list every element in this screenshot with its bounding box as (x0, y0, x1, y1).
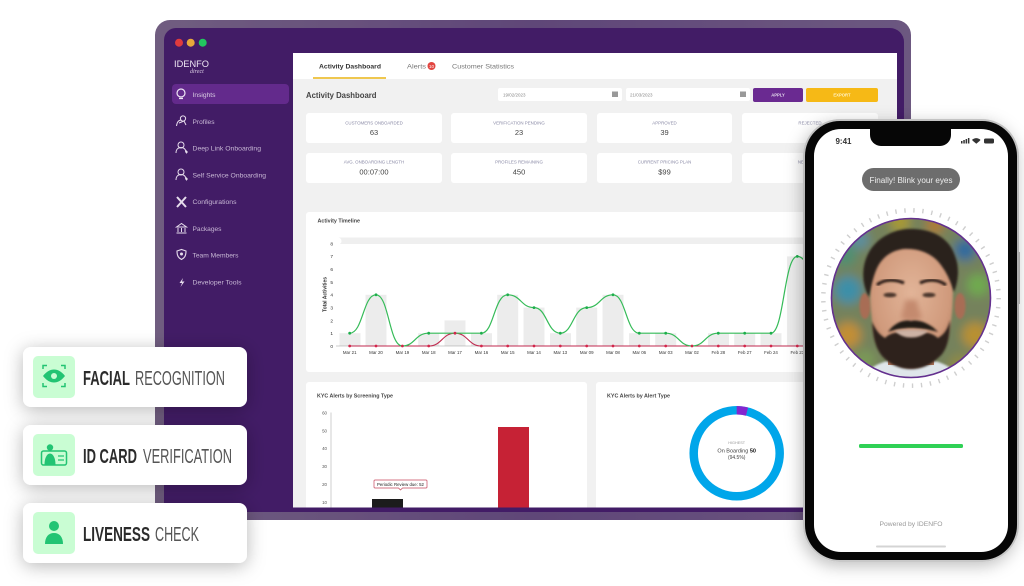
date filters and buttons: APPLY (771, 92, 785, 98)
y axis labels: 5 (330, 280, 333, 286)
label: facial recognition: FACIAL (83, 368, 130, 390)
stat: verification pending: VERIFICATION PENDING (493, 120, 545, 126)
phone body (803, 119, 1019, 562)
status bar time: 9:41 (835, 137, 852, 146)
y axis labels (322, 410, 328, 505)
window control dots (175, 39, 207, 47)
status icons (961, 138, 994, 144)
stat: next plan (742, 153, 878, 183)
panel: KYC alerts by alert type (596, 382, 886, 512)
face photo (830, 218, 992, 378)
y axis labels: 50 (322, 428, 328, 434)
nav item: Profiles (176, 116, 214, 126)
nav item: Self Service Onboarding: Self Service Onboarding (192, 172, 266, 180)
x axis labels: Mar 16 (475, 350, 489, 355)
stat: approved (597, 113, 732, 143)
label: facial recognition: RECOGNITION (135, 368, 225, 390)
label: id card verification: ID CARD (83, 446, 137, 468)
donut chart (694, 410, 780, 496)
tab bar: Alerts (407, 64, 427, 70)
y axis line (330, 412, 332, 508)
stat: current pricing plan: CURRENT PRICING PLAN (638, 160, 691, 164)
nav item: Packages (176, 224, 222, 233)
main content area (293, 53, 897, 508)
nav item: Deep Link Onboarding (176, 142, 261, 154)
label: liveness check: LIVENESS (83, 524, 150, 546)
feature badge: liveness check (23, 503, 247, 563)
y axis labels: 2 (330, 318, 333, 324)
icon: person (33, 512, 75, 554)
y axis labels: 60 (322, 410, 328, 416)
active nav item: Insights (172, 84, 289, 104)
instruction pill (862, 168, 960, 191)
x axis labels: Mar 18 (422, 350, 436, 355)
nav item: Configurations: Configurations (192, 199, 236, 206)
activity bars (340, 256, 808, 346)
y axis labels: 1 (330, 331, 333, 337)
y axis labels: 7 (330, 254, 333, 260)
x axis labels: Mar 03 (659, 350, 673, 355)
x axis labels: Feb 23 (790, 350, 805, 355)
neck (888, 360, 934, 365)
logo: IDENFO: direct (190, 69, 204, 75)
tab bar: Customer Statistics (452, 64, 515, 70)
y axis labels: 3 (330, 306, 333, 312)
laptop inner purple surface (164, 28, 904, 512)
x axis labels: Mar 02 (685, 350, 699, 355)
date filters and buttons: 19/02/2023 (503, 92, 526, 98)
nav item: Team Members: Team Members (192, 252, 238, 260)
phone screen (814, 129, 1008, 552)
page heading: Activity Dashboard (306, 91, 377, 100)
logo: IDENFO (174, 59, 209, 75)
label: id card verification: VERIFICATION (143, 446, 232, 468)
home indicator (876, 546, 946, 548)
tab bar (293, 53, 897, 79)
stat: approved: 39 (660, 128, 669, 137)
black bar (372, 499, 403, 508)
smile (895, 330, 928, 338)
stat: avg onboarding length (306, 153, 442, 183)
y axis labels: 10 (322, 500, 328, 505)
label: id card verification (83, 446, 232, 468)
active nav item: Insights: Insights (192, 92, 216, 99)
stat: next plan: NEXT PLAN (798, 160, 822, 164)
panel: KYC alerts by screening type (306, 382, 587, 512)
donut purple segment (737, 410, 747, 412)
x axis labels: Feb 27 (738, 350, 752, 355)
stat: current pricing plan (597, 153, 732, 183)
x axis labels: Mar 21 (343, 350, 357, 355)
baseline (336, 345, 808, 347)
eyebrows (877, 280, 946, 285)
x axis labels: Mar 17 (448, 350, 462, 355)
beard (872, 320, 950, 369)
x axis labels: Mar 09 (580, 350, 594, 355)
eyes (884, 293, 936, 297)
screening type bar chart (322, 410, 529, 508)
label: facial recognition (83, 368, 225, 390)
date filters and buttons (498, 88, 878, 102)
ears (860, 293, 966, 319)
y axis labels: 4 (330, 292, 333, 298)
x axis labels: Mar 19 (396, 350, 410, 355)
x axis labels: Mar 08 (606, 350, 620, 355)
x axis labels: Mar 06 (632, 350, 647, 355)
stat: profiles remaining: 450 (513, 168, 525, 176)
stat: verification pending (451, 113, 587, 143)
green series line (350, 256, 806, 346)
feature badge: facial recognition (23, 347, 247, 407)
tick ring (823, 210, 999, 386)
panel: activity timeline (306, 212, 884, 372)
face ring (832, 218, 990, 378)
tab bar: 10 (429, 64, 434, 69)
nav item: Developer Tools: Developer Tools (192, 280, 242, 286)
x axis labels: Mar 15 (501, 350, 515, 355)
progress bar (859, 444, 963, 448)
stat: avg onboarding length: AVG. ONBOARDING LENGTH (344, 160, 404, 164)
green series points (348, 255, 799, 335)
donut center label: (94.5%) (728, 455, 746, 461)
tooltip: Periodic Review due: 52 (377, 482, 425, 487)
red bar (498, 427, 529, 508)
label: liveness check: CHECK (155, 524, 199, 546)
phone bezel (805, 121, 1017, 560)
y axis labels: 30 (322, 464, 328, 469)
x axis labels: Mar 14 (527, 350, 541, 355)
nav item: Team Members (177, 250, 238, 260)
timeline chart (322, 242, 808, 355)
y axis labels: 8 (330, 242, 333, 248)
nav item: Self Service Onboarding (176, 169, 266, 180)
stat: profiles remaining (451, 153, 587, 183)
nav item: Developer Tools (180, 278, 242, 287)
y axis labels: 0 (330, 344, 333, 350)
timeline range slider (334, 238, 808, 244)
nav item: Deep Link Onboarding: Deep Link Onboarding (192, 146, 261, 152)
nav item: Packages: Packages (192, 226, 222, 233)
hair (863, 229, 958, 297)
stat: customers onboarded (306, 113, 442, 143)
x axis labels (343, 350, 805, 355)
date filters and buttons: 21/03/2023 (630, 92, 653, 98)
logo: IDENFO: IDENFO (174, 59, 209, 70)
stat cards (306, 113, 878, 183)
y axis labels: 20 (322, 482, 328, 487)
notch (870, 129, 951, 146)
x axis labels: Feb 24 (764, 350, 778, 355)
phone side button (1018, 252, 1020, 304)
stat: customers onboarded: CUSTOMERS ONBOARDED (345, 120, 403, 126)
x axis labels: Feb 28 (711, 350, 726, 355)
face shape (870, 244, 953, 368)
red series points (348, 332, 799, 347)
nose shadow (901, 300, 921, 321)
nav item: Profiles: Profiles (192, 119, 214, 126)
y axis labels: 40 (322, 446, 328, 451)
donut center label: HIGHEST (728, 441, 746, 445)
heading: activity timeline: Activity Timeline (318, 218, 360, 224)
axis title: Total Activities (322, 277, 328, 312)
instruction pill: Finally! Blink your eyes (870, 176, 952, 185)
laptop dashboard mockup (155, 20, 911, 520)
stat: profiles remaining: PROFILES REMAINING (495, 160, 543, 164)
laptop frame (155, 20, 911, 520)
stat: rejected: REJECTED (798, 120, 822, 126)
mustache (888, 320, 938, 332)
powered by text: Powered by IDENFO (880, 521, 942, 528)
tab bar: Activity Dashboard (319, 64, 381, 70)
nav item: Configurations (177, 197, 236, 207)
stat: approved: APPROVED (652, 120, 677, 126)
donut center label: On Boarding 50 (717, 448, 756, 454)
blurred background (832, 220, 989, 366)
stat: current pricing plan: $99 (658, 168, 671, 176)
shirt (872, 360, 950, 377)
icon: facial scan eye (33, 356, 75, 398)
stat: rejected (742, 113, 878, 143)
x axis labels: Mar 20 (369, 350, 383, 355)
stat: customers onboarded: 63 (370, 128, 378, 137)
stat: avg onboarding length: 00:07:00 (359, 168, 389, 176)
tooltip (374, 480, 427, 490)
donut center label (717, 441, 756, 461)
sidebar navigation (172, 84, 289, 287)
y axis labels: 6 (330, 267, 333, 273)
phone mockup (803, 119, 1020, 562)
heading: alert type: KYC Alerts by Alert Type (607, 394, 670, 400)
heading: screening type: KYC Alerts by Screening Type (317, 394, 393, 400)
red series line (350, 333, 808, 346)
feature badge: id card verification (23, 425, 247, 485)
x axis labels: Mar 13 (553, 350, 568, 355)
icon: id card (33, 434, 75, 476)
stat: verification pending: 23 (515, 128, 523, 137)
laptop bottom purple lip (164, 508, 904, 512)
y axis labels (330, 242, 333, 350)
date filters and buttons: EXPORT (833, 92, 851, 98)
